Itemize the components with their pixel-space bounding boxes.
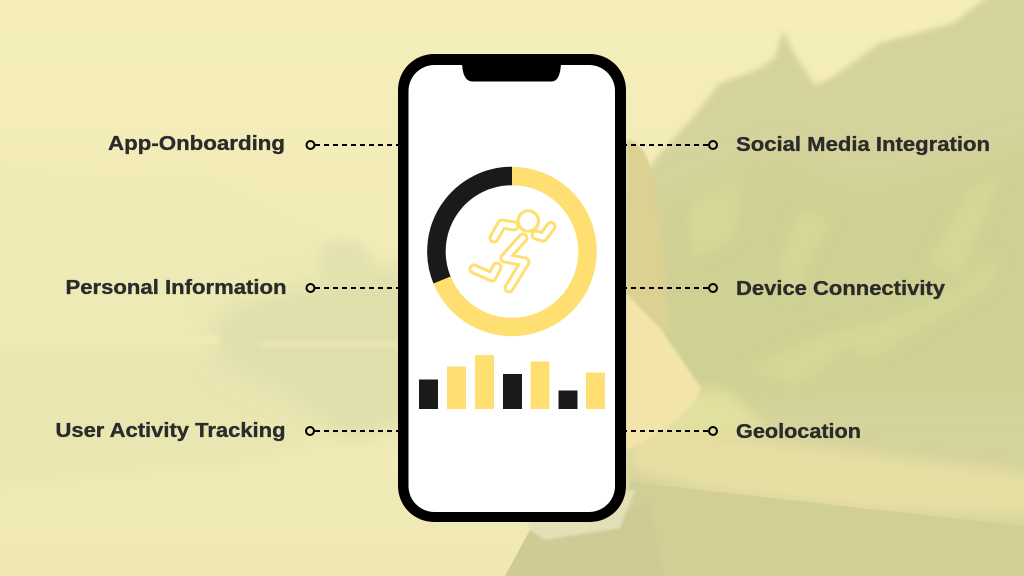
icon: runner xyxy=(474,211,551,288)
connector: Device Connectivity xyxy=(624,284,717,292)
phone notch xyxy=(462,64,561,82)
label: Geolocation: Geolocation xyxy=(736,421,861,443)
label: Device Connectivity: Device Connectivity xyxy=(736,278,946,300)
connector: User Activity Tracking xyxy=(306,427,400,435)
label: Personal Information: Personal Information xyxy=(66,277,286,299)
label: Social Media Integration: Social Media Integration xyxy=(736,134,990,156)
label: App-Onboarding: App-Onboarding xyxy=(108,133,285,155)
connector: Personal Information xyxy=(306,284,400,292)
phone screen xyxy=(408,65,615,512)
label: User Activity Tracking: User Activity Tracking xyxy=(56,420,286,442)
phone body xyxy=(398,54,626,522)
connector: App-Onboarding xyxy=(306,141,400,149)
donut chart xyxy=(436,176,588,327)
phone xyxy=(398,54,626,522)
connector: Geolocation xyxy=(624,427,717,435)
connector: Social Media Integration xyxy=(624,141,717,149)
bar chart xyxy=(419,355,605,409)
